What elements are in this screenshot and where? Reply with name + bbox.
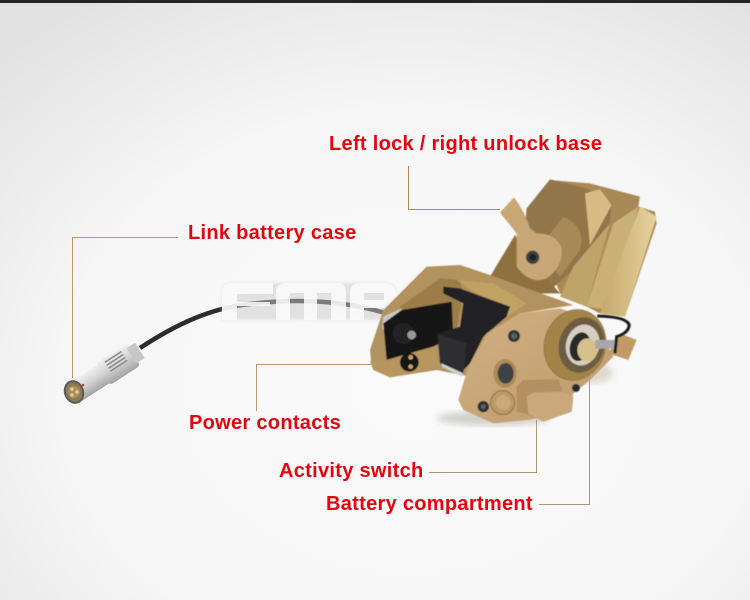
leader line bbox=[539, 380, 590, 504]
leader line bbox=[429, 420, 536, 472]
lanyard bbox=[597, 316, 629, 353]
leader line bbox=[256, 364, 372, 411]
leader line bbox=[408, 166, 500, 210]
dark octagon plate bbox=[520, 179, 612, 293]
callout: link battery case bbox=[72, 222, 357, 378]
label: Power contacts bbox=[189, 412, 341, 434]
screws bbox=[508, 330, 520, 342]
callout: battery compartment bbox=[326, 380, 590, 515]
connector body bbox=[69, 339, 147, 403]
watermark letters bbox=[222, 283, 397, 320]
knurled ring bbox=[536, 303, 614, 387]
watermark shadow bbox=[222, 283, 399, 320]
activity switch bbox=[517, 379, 573, 422]
label: Activity switch bbox=[279, 460, 424, 482]
inner tan panel bbox=[400, 278, 463, 330]
callout: activity switch bbox=[279, 420, 536, 482]
rear tab bbox=[608, 333, 637, 360]
label: Left lock / right unlock base bbox=[329, 133, 602, 155]
connector face bbox=[62, 379, 86, 405]
pivot support bbox=[490, 235, 560, 293]
front housing bbox=[458, 308, 613, 423]
central black block bbox=[438, 287, 510, 370]
contact housing bbox=[370, 347, 440, 377]
device bbox=[370, 179, 657, 426]
cable bbox=[140, 301, 385, 348]
chassis bbox=[370, 265, 573, 377]
label: Battery compartment bbox=[326, 493, 533, 515]
battery cap post bbox=[577, 338, 597, 362]
window port bbox=[493, 359, 517, 388]
ground shadow bbox=[437, 411, 550, 426]
leader line bbox=[72, 238, 178, 378]
device body bbox=[370, 179, 657, 423]
watermark bbox=[222, 283, 399, 320]
mount plate back bbox=[527, 180, 657, 317]
plate highlights bbox=[585, 189, 612, 245]
label: Link battery case bbox=[188, 222, 357, 244]
round cap bbox=[491, 391, 515, 415]
cable and connector bbox=[62, 301, 385, 405]
black panel bbox=[383, 302, 453, 360]
rails bbox=[437, 333, 467, 373]
top edge strip bbox=[0, 0, 750, 3]
lock lever bbox=[500, 197, 562, 280]
callout: lock base bbox=[329, 133, 602, 210]
callout: power contacts bbox=[189, 364, 372, 434]
glass edge bbox=[382, 308, 402, 330]
